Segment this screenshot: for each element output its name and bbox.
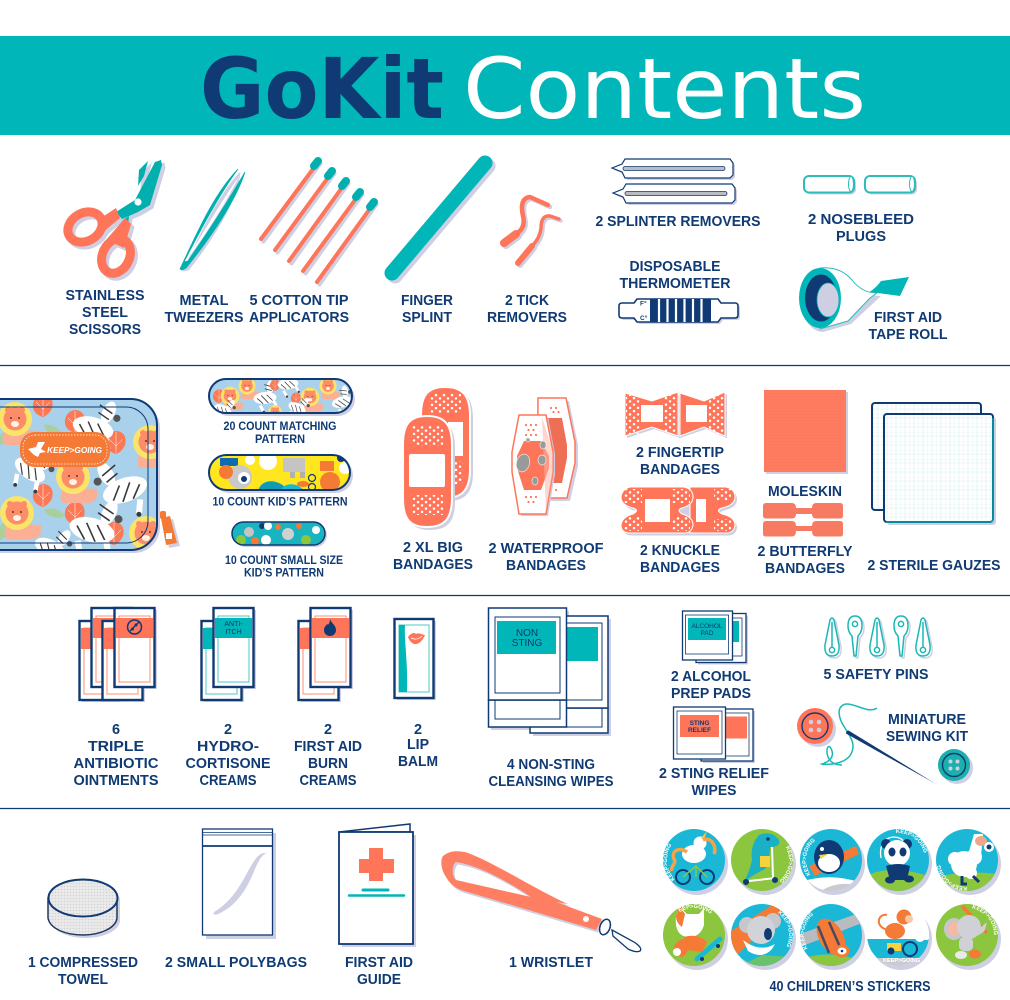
label: 10 count small size kid's pattern: KID’S PATTERN bbox=[244, 568, 324, 580]
label: nosebleed plugs bbox=[808, 212, 914, 245]
label: triple antibiotic ointments bbox=[74, 722, 159, 789]
item: first aid guide bbox=[339, 824, 416, 988]
item: finger splint bbox=[392, 163, 488, 326]
label: 1 compressed towel bbox=[28, 955, 138, 988]
sticker: sloth on branch bbox=[800, 904, 865, 970]
label: 20 count matching pattern bbox=[224, 421, 337, 446]
label: metal tweezers: TWEEZERS bbox=[164, 310, 244, 326]
icon: cotton tips bbox=[261, 161, 376, 284]
label: 2 butterfly bandages: 2 BUTTERFLY bbox=[758, 544, 853, 560]
label: first aid tape roll: FIRST AID bbox=[874, 310, 942, 326]
icon: moleskin sheet bbox=[764, 390, 848, 474]
label: 2 waterproof bandages bbox=[488, 541, 604, 574]
icon: thermometer: F° bbox=[640, 300, 647, 308]
label: first aid burn creams: FIRST AID bbox=[294, 739, 362, 755]
icon: compressed towel bbox=[48, 880, 120, 938]
icon: thermometer bbox=[619, 299, 740, 324]
section dividers bbox=[0, 366, 1010, 808]
label: disposable thermometer bbox=[620, 259, 731, 292]
item: burn creams bbox=[294, 608, 362, 789]
sticker: fox on skateboard bbox=[663, 904, 728, 970]
sticker text: KEEP>GOING bbox=[678, 904, 712, 914]
icon: kid's pattern strip bbox=[209, 452, 353, 493]
item: fingertip bandages bbox=[625, 392, 727, 478]
icon: sterile gauzes bbox=[872, 403, 996, 525]
item: moleskin bbox=[764, 390, 848, 500]
item: wristlet bbox=[441, 851, 641, 971]
label: 4 non-sting cleansing wipes bbox=[488, 757, 614, 790]
sticker text: KEEP>GOING bbox=[802, 838, 815, 876]
label: stainless steel scissors: SCISSORS bbox=[69, 322, 141, 338]
icon: alcohol prep pads bbox=[682, 611, 748, 664]
label: first aid guide bbox=[345, 955, 413, 988]
label: 2 fingertip bandages: BANDAGES bbox=[640, 462, 720, 478]
label: cotton tip applicators: APPLICATORS bbox=[249, 310, 349, 326]
label: 2 alcohol prep pads: 2 ALCOHOL bbox=[671, 669, 751, 685]
label: 2 sting relief wipes: WIPES bbox=[692, 783, 737, 799]
icon: cleansing wipes: NON bbox=[516, 628, 538, 639]
label: 2 alcohol prep pads bbox=[671, 669, 751, 702]
item: tweezers bbox=[164, 169, 245, 326]
icon: coral button bbox=[797, 708, 836, 747]
label: 10 count kid's pattern: 10 COUNT KID’S PATTERN bbox=[212, 496, 348, 508]
item: XL bandages bbox=[393, 387, 473, 573]
item: cotton tip applicators bbox=[249, 161, 376, 326]
item: hydro-cortisone creams bbox=[186, 608, 271, 789]
sticker: panda jump rope bbox=[867, 829, 932, 895]
icon: waterproof bandages bbox=[512, 398, 578, 516]
item: cleansing wipes bbox=[488, 608, 614, 790]
item: knuckle bandages bbox=[621, 487, 737, 576]
title: GoKit: GoKit bbox=[200, 40, 444, 138]
label: first aid tape roll bbox=[868, 310, 948, 343]
icon: tape roll bbox=[799, 268, 909, 332]
icon: tweezers bbox=[180, 169, 245, 272]
sticker: elephant bbox=[936, 904, 1001, 970]
label: splinter removers: 2 SPLINTER REMOVERS bbox=[596, 214, 761, 230]
icon: splinter removers bbox=[612, 159, 737, 205]
item: nosebleed plugs bbox=[804, 176, 917, 245]
pouch badge: Keep Going bbox=[20, 432, 110, 467]
label: 1 compressed towel: TOWEL bbox=[58, 972, 108, 988]
icon: cleansing wipes bbox=[488, 608, 611, 736]
icon: sting relief wipes bbox=[674, 707, 755, 763]
label: 2 sting relief wipes: 2 STING RELIEF bbox=[659, 766, 769, 782]
icon: burn cream packets bbox=[298, 608, 353, 702]
icon: knuckle bandages bbox=[621, 487, 737, 536]
label: 2 fingertip bandages: 2 FINGERTIP bbox=[636, 445, 724, 461]
label: 2 butterfly bandages: BANDAGES bbox=[765, 561, 845, 577]
sticker text: KEEP>GOING bbox=[800, 912, 813, 950]
label: metal tweezers bbox=[164, 293, 244, 326]
label: 40 children's stickers: 40 CHILDREN’S STICKERS bbox=[770, 979, 931, 995]
item: matching pattern bandages bbox=[208, 378, 355, 443]
icon: sting relief wipes: RELIEF bbox=[688, 727, 711, 734]
icon: teal button bbox=[938, 749, 973, 784]
sticker: penguin snowboarding bbox=[800, 829, 865, 895]
stickers group bbox=[663, 829, 1001, 995]
label: first aid guide: GUIDE bbox=[357, 972, 401, 988]
sticker text: KEEP>GOING bbox=[972, 904, 998, 935]
label: metal tweezers: METAL bbox=[180, 293, 229, 309]
label: finger splint: FINGER bbox=[401, 293, 453, 309]
icon: sting relief wipes: STING bbox=[690, 720, 709, 727]
label: 2 knuckle bandages bbox=[640, 543, 720, 576]
item: polybags bbox=[165, 829, 307, 971]
label: 2 butterfly bandages bbox=[758, 544, 853, 577]
item: triple antibiotic ointments bbox=[74, 608, 159, 789]
label: cotton tip applicators bbox=[249, 293, 349, 326]
panel: tools bbox=[62, 159, 948, 343]
label: first aid burn creams bbox=[294, 722, 362, 789]
label: lip balm bbox=[398, 722, 438, 770]
label: triple antibiotic ointments: ANTIBIOTIC bbox=[74, 756, 159, 772]
sticker: dinosaur on scooter bbox=[731, 829, 796, 895]
label: nosebleed plugs: 2 NOSEBLEED bbox=[808, 212, 914, 228]
label: cotton tip applicators: 5 COTTON TIP bbox=[250, 293, 349, 309]
panel: towel, bags, guide, wristlet, stickers bbox=[28, 823, 1001, 995]
item: compressed towel bbox=[28, 880, 138, 988]
icon: thermometer: C° bbox=[640, 314, 648, 322]
label: 10 count small size kid's pattern: 10 COUNT SMALL SIZE bbox=[225, 555, 343, 567]
label: 2 knuckle bandages: BANDAGES bbox=[640, 560, 720, 576]
icon: alcohol prep pads: ALCOHOL bbox=[691, 623, 723, 630]
label: 2 waterproof bandages: BANDAGES bbox=[506, 558, 586, 574]
label: 20 count matching pattern: 20 COUNT MATCHING bbox=[224, 421, 337, 433]
pouch badge: Keep Going: KEEP>GOING bbox=[47, 446, 102, 455]
label: disposable thermometer: THERMOMETER bbox=[620, 276, 731, 292]
label: 2 knuckle bandages: 2 KNUCKLE bbox=[640, 543, 720, 559]
label: miniature sewing kit: MINIATURE bbox=[888, 712, 966, 728]
label: nosebleed plugs: PLUGS bbox=[836, 229, 886, 245]
label: first aid tape roll: TAPE ROLL bbox=[868, 327, 948, 343]
label: hydro-cortisone creams bbox=[186, 722, 271, 789]
icon: anti-itch packets: ITCH bbox=[225, 629, 242, 636]
icon: needle and thread bbox=[822, 704, 936, 784]
sticker text: KEEP>GOING bbox=[896, 829, 928, 853]
icon: polybag bbox=[202, 829, 276, 939]
label: hydro-cortisone creams: 2 bbox=[224, 722, 232, 738]
item: butterfly bandages bbox=[758, 503, 853, 577]
label: 2 alcohol prep pads: PREP PADS bbox=[671, 686, 751, 702]
label: lip balm: LIP bbox=[407, 737, 429, 753]
label: miniature sewing kit bbox=[886, 712, 968, 745]
item: sewing kit bbox=[797, 704, 973, 784]
item: sting relief wipes bbox=[659, 707, 769, 799]
title banner bbox=[0, 36, 1010, 138]
item: alcohol prep pads bbox=[671, 611, 751, 702]
panel: ointments and wipes bbox=[74, 608, 973, 799]
item: tick removers bbox=[487, 197, 567, 326]
label: 2 fingertip bandages bbox=[636, 445, 724, 478]
label: tick removers bbox=[487, 293, 567, 326]
label: 2 small polybags: 2 SMALL POLYBAGS bbox=[165, 955, 307, 971]
icon: wristlet lanyard bbox=[441, 851, 641, 952]
item: pouch bbox=[0, 398, 180, 553]
sticker text: KEEP>GOING bbox=[663, 844, 675, 882]
label: 5 safety pins: 5 SAFETY PINS bbox=[824, 667, 929, 683]
panel: pouch and bandages bbox=[0, 365, 1001, 580]
icon: butterfly bandages bbox=[763, 503, 843, 536]
label: triple antibiotic ointments: 6 bbox=[112, 722, 120, 738]
label: miniature sewing kit: SEWING KIT bbox=[886, 729, 968, 745]
label: hydro-cortisone creams: CORTISONE bbox=[186, 756, 271, 772]
label: 2 sting relief wipes bbox=[659, 766, 769, 799]
label: disposable thermometer: DISPOSABLE bbox=[630, 259, 721, 275]
label: first aid burn creams: CREAMS bbox=[300, 773, 357, 789]
label: hydro-cortisone creams: HYDRO- bbox=[197, 739, 259, 755]
label: 10 count small size kid's pattern bbox=[225, 555, 343, 580]
icon: nosebleed plugs bbox=[804, 176, 917, 194]
label: 1 wristlet: 1 WRISTLET bbox=[509, 955, 593, 971]
label: hydro-cortisone creams: CREAMS bbox=[200, 773, 257, 789]
icon: alcohol prep pads: PAD bbox=[701, 630, 714, 637]
label: finger splint bbox=[401, 293, 453, 326]
label: 4 non-sting cleansing wipes: CLEANSING WIPES bbox=[488, 774, 614, 790]
label: stainless steel scissors: STEEL bbox=[82, 305, 128, 321]
icon: antibiotic packets bbox=[80, 608, 157, 702]
icon: zipper pull bbox=[160, 511, 180, 548]
label: lip balm: 2 bbox=[414, 722, 422, 738]
label: 2 XL big bandages: BANDAGES bbox=[393, 557, 473, 573]
icon: XL bandages bbox=[403, 387, 473, 530]
item: sterile gauzes bbox=[868, 403, 1001, 574]
label: 2 XL big bandages bbox=[393, 540, 473, 573]
sticker: unicorn on bike bbox=[663, 829, 728, 895]
label: lip balm: BALM bbox=[398, 754, 438, 770]
item: tape roll bbox=[799, 268, 948, 343]
item: scissors bbox=[62, 160, 165, 338]
item: safety pins bbox=[824, 616, 932, 683]
label: first aid burn creams: BURN bbox=[308, 756, 348, 772]
item: thermometer bbox=[619, 259, 740, 324]
label: stainless steel scissors bbox=[66, 288, 145, 338]
icon: first aid guide bbox=[339, 824, 416, 947]
icon: small pattern strip bbox=[232, 522, 327, 547]
label: 2 sterile gauzes: 2 STERILE GAUZES bbox=[868, 558, 1001, 574]
label: first aid guide: FIRST AID bbox=[345, 955, 413, 971]
item: waterproof bandages bbox=[488, 398, 604, 574]
label: tick removers: REMOVERS bbox=[487, 310, 567, 326]
icon: tick removers bbox=[504, 197, 561, 265]
sticker: llama with soccer ball bbox=[936, 829, 1001, 895]
icon: safety pins bbox=[825, 616, 932, 658]
item: small size bandages bbox=[225, 522, 343, 580]
label: triple antibiotic ointments: OINTMENTS bbox=[74, 773, 159, 789]
label: stainless steel scissors: STAINLESS bbox=[66, 288, 145, 304]
sticker text: KEEP>GOING bbox=[937, 865, 967, 891]
icon: finger splint bbox=[392, 163, 488, 276]
icon: anti-itch packets: ANTI- bbox=[224, 621, 243, 628]
item: splinter removers bbox=[596, 159, 761, 230]
title: Contents: Contents bbox=[463, 40, 866, 138]
label: 2 XL big bandages: 2 XL BIG bbox=[403, 540, 463, 556]
label: moleskin: MOLESKIN bbox=[768, 484, 842, 500]
label: finger splint: SPLINT bbox=[402, 310, 452, 326]
item: kid's pattern bandages bbox=[209, 452, 353, 508]
label: 1 compressed towel: 1 COMPRESSED bbox=[28, 955, 138, 971]
label: first aid burn creams: 2 bbox=[324, 722, 332, 738]
icon: lip balm packet bbox=[394, 619, 436, 700]
label: 4 non-sting cleansing wipes: 4 NON-STING bbox=[507, 757, 595, 773]
label: 20 count matching pattern: PATTERN bbox=[255, 434, 305, 446]
icon: patterned pouch bbox=[0, 398, 160, 553]
sticker text: KEEP>GOING bbox=[778, 910, 793, 948]
sticker text: KEEP>GOING bbox=[780, 846, 793, 883]
sticker text: KEEP>GOING bbox=[883, 958, 920, 964]
icon: scissors bbox=[62, 160, 165, 281]
sticker: monkey on tricycle bbox=[867, 904, 933, 970]
item: lip balm bbox=[394, 619, 438, 770]
label: tick removers: 2 TICK bbox=[505, 293, 550, 309]
icon: matching pattern strip bbox=[208, 378, 355, 416]
sticker: koala on branch bbox=[731, 904, 796, 970]
label: 2 waterproof bandages: 2 WATERPROOF bbox=[488, 541, 604, 557]
icon: fingertip bandages bbox=[625, 392, 727, 438]
icon: anti-itch packets bbox=[202, 608, 256, 702]
label: triple antibiotic ointments: TRIPLE bbox=[88, 739, 144, 755]
icon: cleansing wipes: STING bbox=[512, 638, 542, 649]
